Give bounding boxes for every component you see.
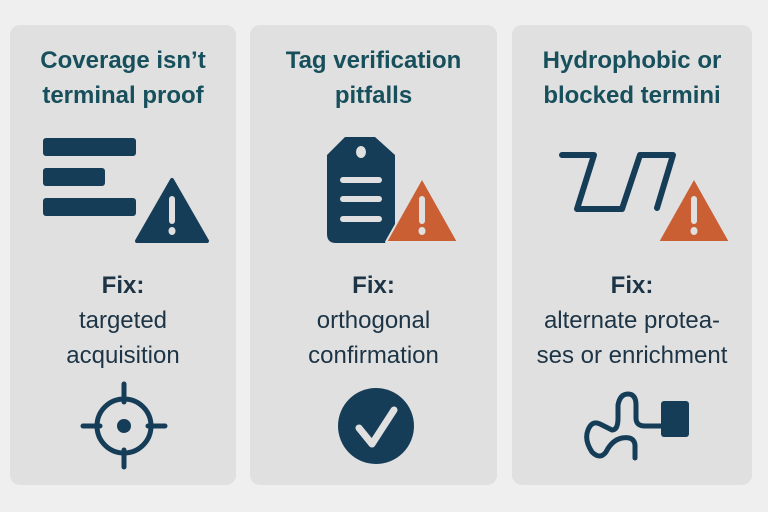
title: blocked termini — [543, 82, 721, 109]
fix text: targeted — [79, 307, 167, 334]
fix text: ses or enrichment — [537, 342, 727, 369]
fix text: orthogonal — [317, 307, 430, 334]
fix text — [66, 272, 180, 369]
title: terminal proof — [42, 82, 204, 109]
icon: tag with warning — [327, 137, 458, 243]
panel: tag — [250, 25, 497, 485]
panel: hydrophobic — [512, 25, 752, 485]
fix text: acquisition — [66, 342, 180, 369]
panel: coverage — [10, 25, 236, 485]
title: Coverage isn’t — [40, 47, 206, 74]
fix text: confirmation — [308, 342, 439, 369]
icon: zigzag with warning — [562, 155, 730, 242]
icon: bars with warning — [43, 138, 207, 241]
fix text — [308, 272, 439, 369]
title: Tag verification — [286, 47, 461, 74]
title — [40, 47, 206, 109]
fix text: alternate protea- — [544, 307, 720, 334]
title — [543, 47, 721, 109]
title — [286, 47, 461, 109]
fix text: Fix: — [611, 272, 653, 299]
fix text: Fix: — [102, 272, 144, 299]
title: pitfalls — [335, 82, 412, 109]
title: Hydrophobic or — [543, 47, 721, 74]
fix text — [537, 272, 728, 369]
icon: squiggle with block — [587, 394, 689, 458]
icon: crosshair — [83, 384, 165, 467]
icon: check circle — [338, 388, 414, 464]
fix text: Fix: — [352, 272, 395, 299]
